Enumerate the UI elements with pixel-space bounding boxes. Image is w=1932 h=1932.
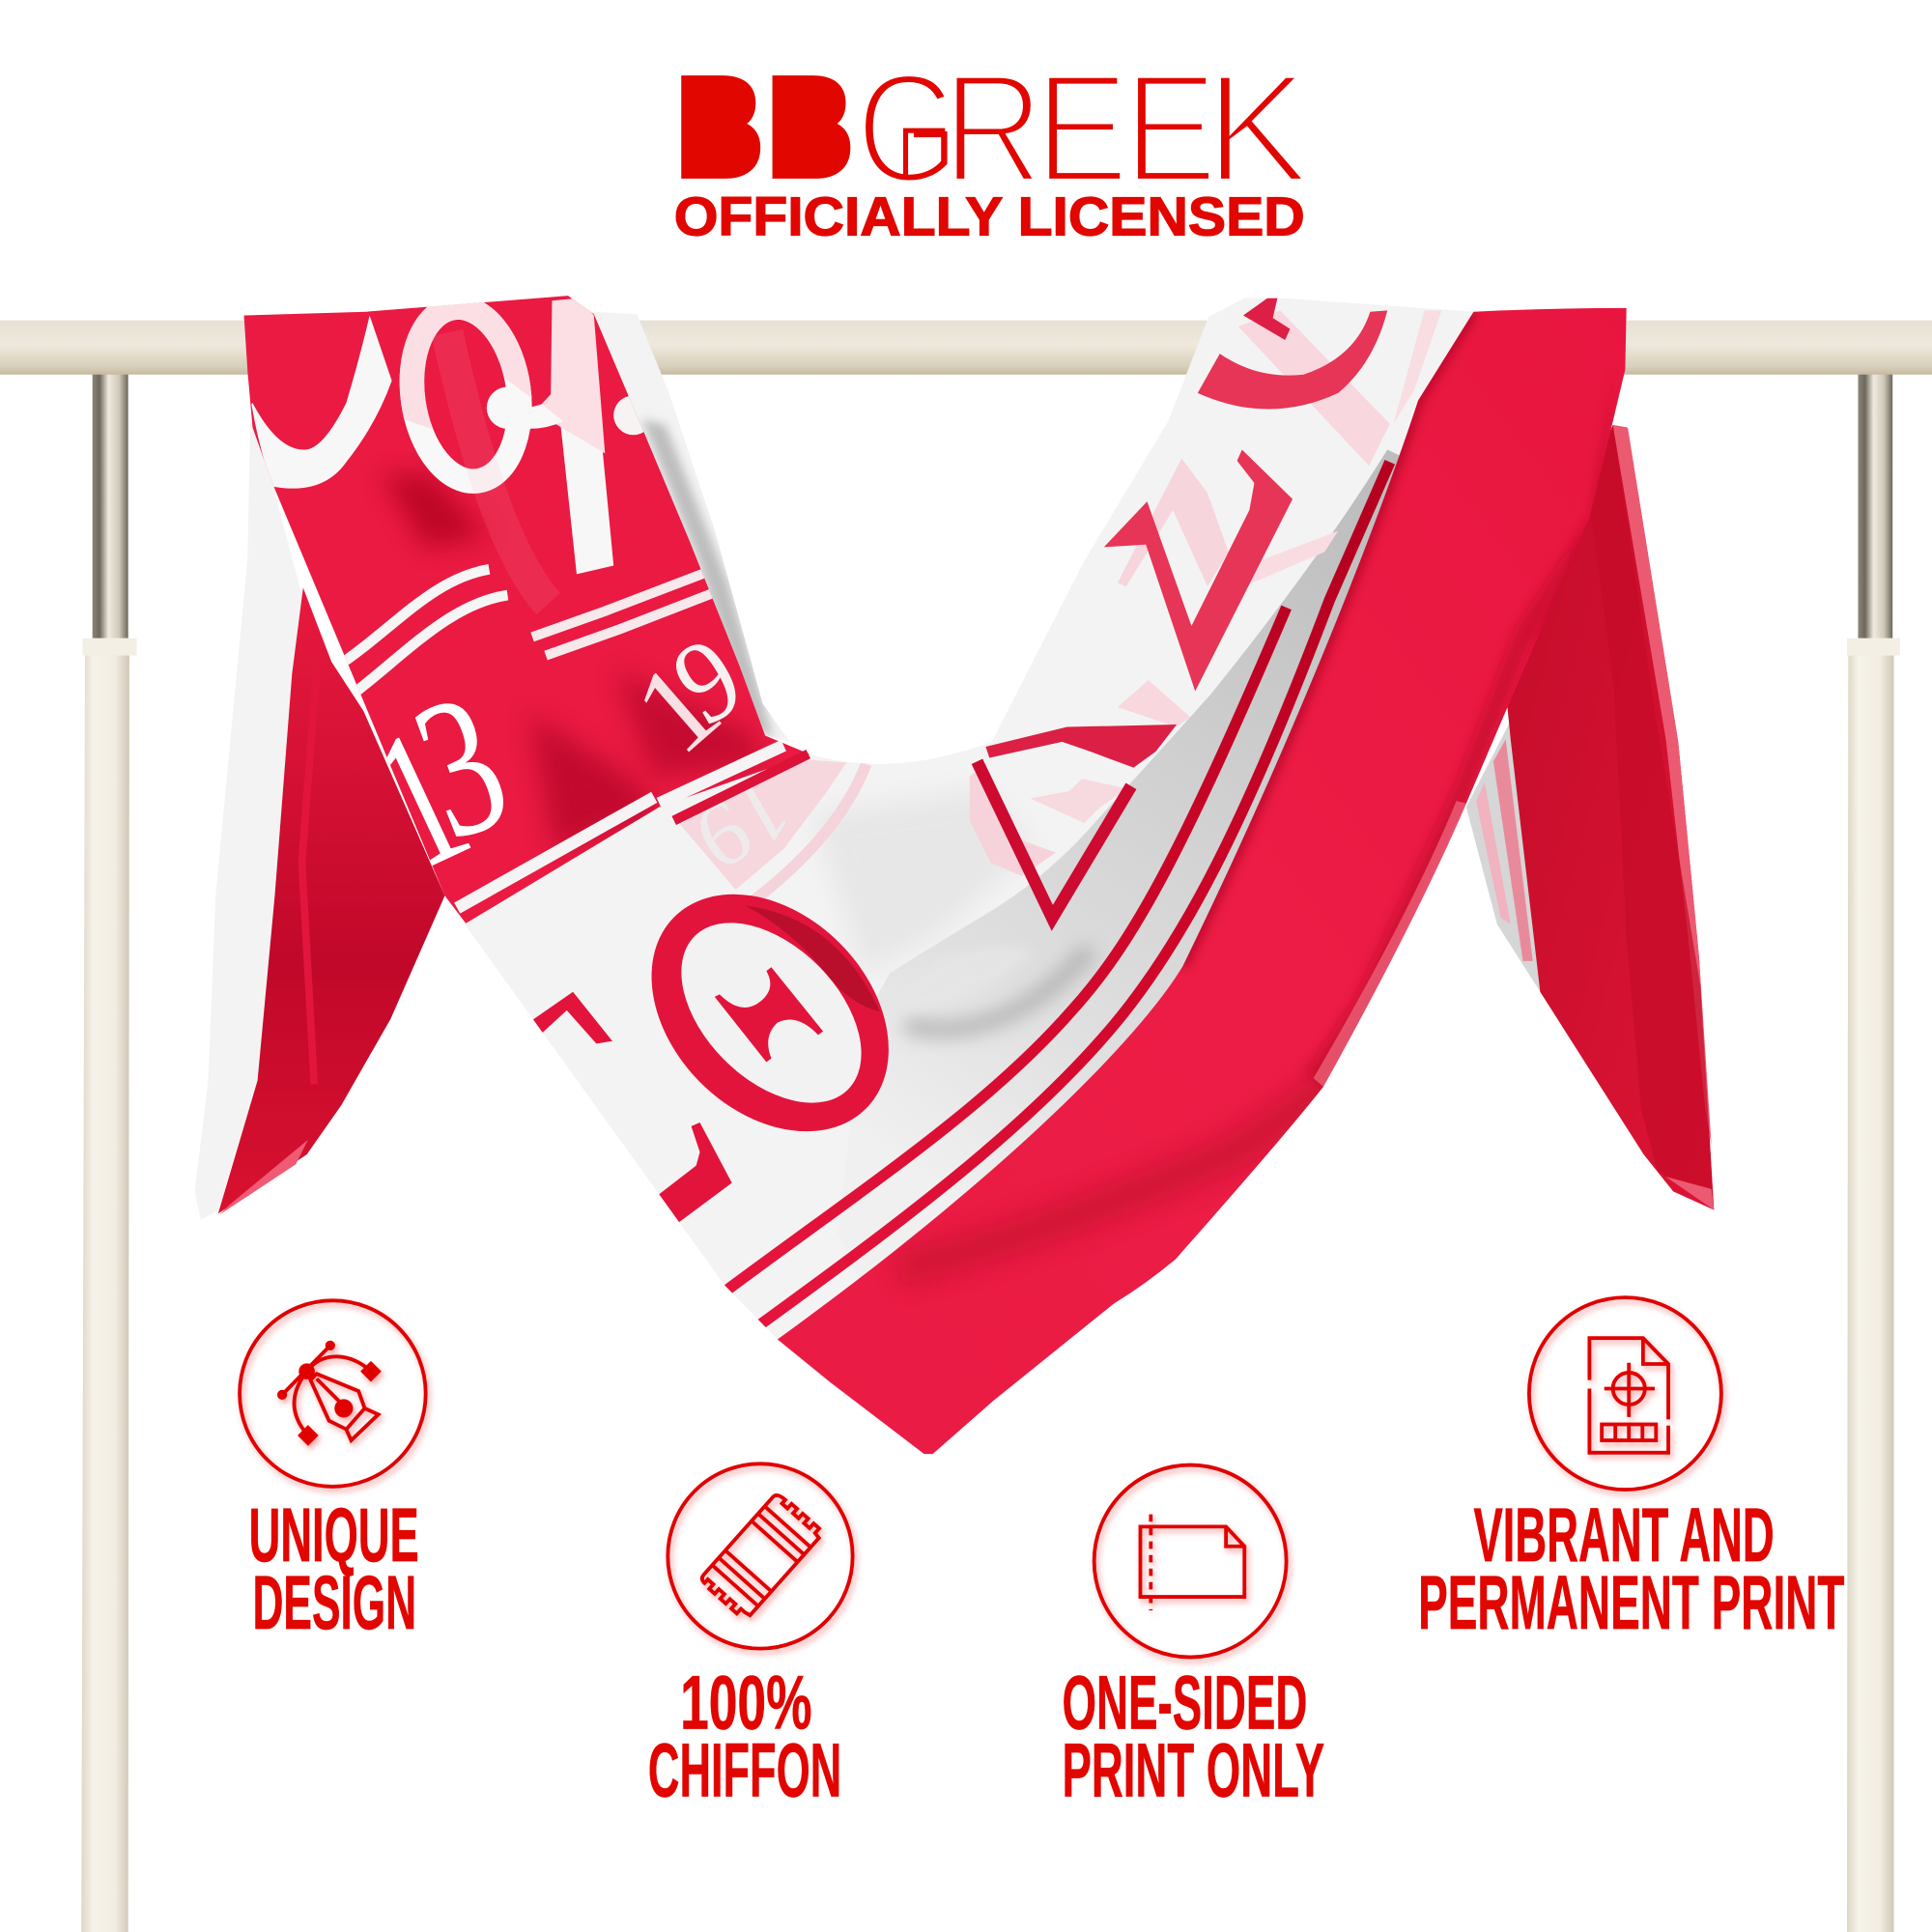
icon: sheet with fold line [1094, 1465, 1287, 1658]
print: show-through area left [680, 759, 846, 890]
inner edge strip [1182, 312, 1474, 966]
front red strap [244, 296, 810, 926]
feature: unique design [240, 1300, 426, 1645]
logo: GREEK thin: K [1205, 43, 1310, 215]
logo: GREEK thin: G [856, 43, 960, 215]
red border body [778, 308, 1627, 1454]
logo: GREEK thin: R [943, 43, 1043, 215]
feature: unique design: DESIGN [252, 1559, 416, 1645]
feature: one-sided print [1062, 1465, 1324, 1813]
left flap red [218, 587, 444, 1215]
logo: BB solid: B [768, 49, 853, 205]
logo: BB solid [676, 49, 853, 205]
right post steel [1858, 370, 1892, 639]
print: numeral one upper show-through [535, 298, 605, 453]
print: nine ball [487, 386, 508, 429]
print: stripes upper right [532, 573, 711, 656]
feature: one-sided print: PRINT ONLY [1062, 1727, 1324, 1813]
print: large zero arc [251, 316, 392, 489]
left post steel [93, 370, 128, 639]
outer edge sheer band [1306, 518, 1589, 1087]
strap shading [251, 298, 783, 913]
print: show-through zigzag [1118, 458, 1229, 586]
feature: vibrant and permanent print [1418, 1297, 1844, 1645]
icon: pen tool [240, 1300, 426, 1487]
scarf [195, 296, 1714, 1454]
logo: GREEK thin: E [1035, 43, 1128, 215]
print: numeral one [560, 425, 613, 574]
left post tube [81, 653, 129, 1932]
border stripe inner [727, 608, 1287, 1290]
print: nine tail [529, 404, 563, 429]
right collar [1847, 639, 1900, 656]
print: arc [1198, 310, 1387, 409]
left flap white edge [195, 421, 303, 1220]
print: small arc [1243, 297, 1290, 340]
print: show-through band [447, 332, 549, 604]
print: show-through ring centre [970, 764, 1056, 876]
print: show-through numerals: 19 [678, 757, 808, 890]
feature: chiffon [648, 1463, 853, 1813]
label: ONE-SIDED [1062, 1660, 1307, 1746]
print: theta ring inner [647, 889, 895, 1137]
print: lower stripe on white [674, 754, 809, 820]
print: large zero ring [401, 300, 530, 488]
logo: officially licensed: OFFICIALLY LICENSED [674, 186, 1305, 247]
logo: GREEK thin [856, 43, 1310, 215]
print: triangle top band [985, 724, 1177, 768]
lower fold shading [877, 450, 1399, 1155]
print: letter shape [1104, 450, 1293, 692]
border stripe outer [760, 462, 1390, 1324]
bulge shadow [906, 949, 1091, 1029]
print: show-through stripe left [746, 764, 867, 907]
left collar [82, 639, 137, 656]
print: large zero ring show-through [400, 302, 531, 430]
print: numeral 1 of 19: 1 [609, 636, 745, 780]
print: show-through band top right [1238, 310, 1390, 466]
print: show-through lower [1118, 680, 1190, 727]
top rail [0, 321, 1932, 375]
right strap sliver [593, 312, 790, 742]
logo: G inner stem [906, 130, 945, 178]
print: show-through letter centre [1030, 779, 1127, 823]
feature: chiffon: CHIFFON [648, 1727, 841, 1813]
print: theta ring outer [605, 847, 936, 1179]
white centre panel [465, 297, 1479, 1343]
lower fold band [899, 1072, 1343, 1269]
print: stripes upper left [335, 569, 508, 697]
print: letter foot [653, 1122, 732, 1226]
print: serif piece [528, 992, 612, 1043]
print: lower stripes [457, 746, 783, 908]
label: UNIQUE [249, 1492, 419, 1577]
logo [674, 43, 1310, 247]
label: 100% [680, 1660, 812, 1746]
logo: GREEK thin: E [1123, 43, 1217, 215]
print: numeral 9 of 19: 9 [652, 611, 762, 750]
print: show-through diagonal [1226, 531, 1338, 591]
bulge highlight [877, 946, 1033, 1012]
right back flap [1506, 425, 1714, 1210]
print: dot [613, 396, 643, 435]
logo: BB solid: B [676, 49, 763, 205]
right back flap white stripe piece [1466, 721, 1555, 996]
print: theta bar [715, 967, 823, 1062]
right post tube [1847, 653, 1893, 1932]
print: show-through stripe top right [1394, 310, 1441, 424]
icon: print file [1529, 1297, 1721, 1490]
icon: scarf [668, 1463, 853, 1649]
print: numeral 1 of 13: 1 [342, 686, 497, 913]
soft upper shading [827, 796, 1003, 958]
print: theta ring shaded overlap [746, 906, 880, 1011]
print: triangle [977, 761, 1131, 918]
print: numeral 3 of 13: 3 [389, 650, 532, 882]
